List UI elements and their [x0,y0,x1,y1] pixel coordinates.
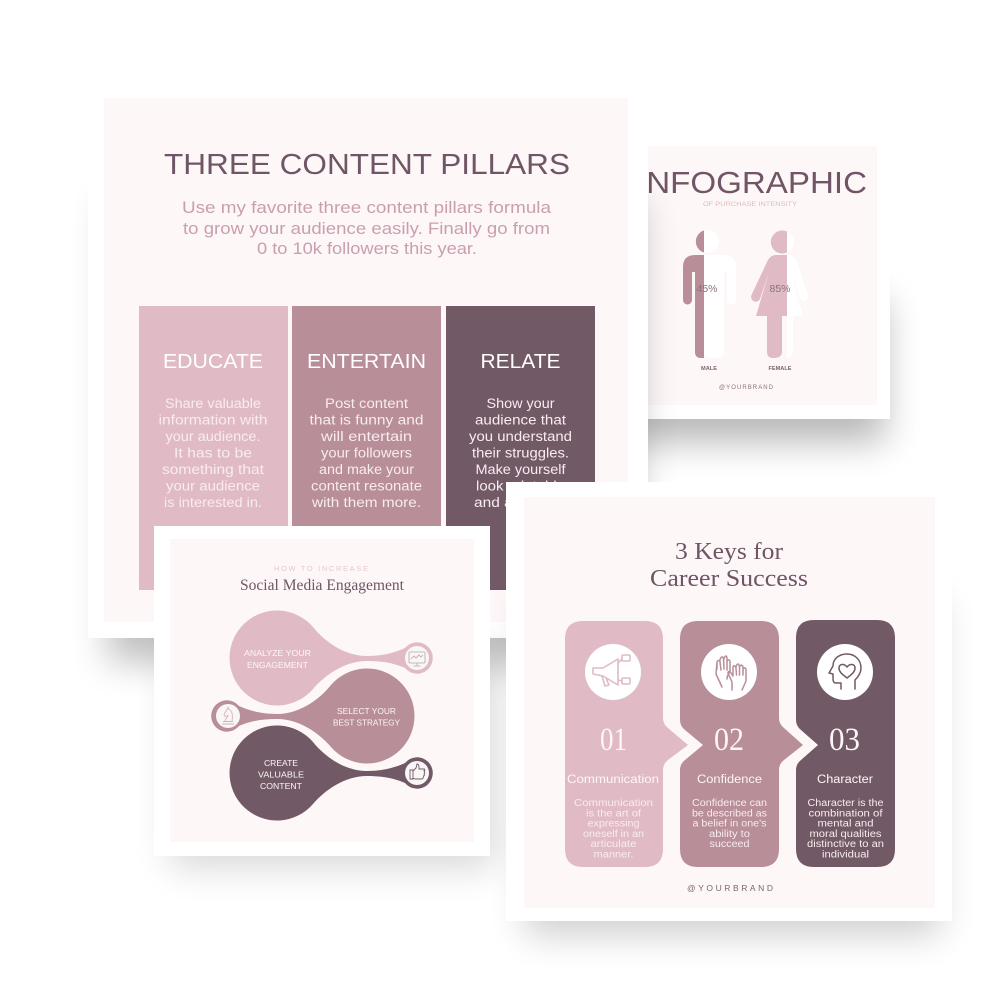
intro text [182,199,552,258]
key card: character: mental and [818,819,874,830]
pillar column: relate: Show your [486,396,555,411]
key card: communication [565,621,688,867]
brand handle: @YOURBRAND [719,385,774,391]
panel: career success card [506,482,952,935]
pillar column: relate: audience that [475,412,566,428]
pillar column: educate: something that [162,462,264,477]
panel: infographic purchase intensity card [600,132,890,442]
key card: character: 03 [829,722,860,758]
female percentage: 85% [770,284,791,295]
pillar column: relate: look relatable [476,478,565,494]
blob: create valuable content: VALUABLE [258,770,304,780]
blob: create valuable content: CONTENT [260,781,302,791]
key card: character [796,620,895,867]
blob: analyze your engagement: ANALYZE YOUR [244,648,311,658]
key card: character: distinctive to an [807,839,884,850]
key card: character: moral qualities [810,829,882,840]
icon: male figure 45% [683,230,736,358]
heading: three content pillars: THREE CONTENT PILLARS [164,149,570,181]
heading: 3 keys for career success: Career Success [650,565,808,592]
heading: social media engagement: Social Media Engagement [240,577,405,594]
icon: monitor [409,652,425,666]
icon: head with heart [829,654,861,689]
key card: character: combination of [808,808,883,819]
key card: communication: oneself in an [583,829,644,840]
pillar column: entertain: will entertain [320,429,412,444]
pillar column: entertain: with them more. [311,495,421,510]
pillar column: educate [139,306,288,590]
icon: female figure 85% [751,231,808,358]
blob: analyze your engagement: ENGAGEMENT [247,660,308,670]
pillar column: entertain: your followers [321,446,412,460]
female label: FEMALE [768,366,792,372]
blob: create valuable content: CREATE [264,758,298,768]
intro text: Use my favorite three content pillars formula [182,199,552,217]
eyebrow: how to increase: HOW TO INCREASE [274,564,368,573]
blob: create valuable content [230,726,433,820]
key card: confidence: a belief in one's [692,819,766,830]
male percentage: 45% [696,284,718,295]
blob: select your best strategy [211,669,414,764]
pillar column: educate: It has to be [174,446,252,460]
key card: communication: is the art of [586,808,641,819]
key card: communication: manner. [594,850,634,860]
icon: thumbs up [410,764,425,779]
icon: megaphone [593,655,630,686]
blob: analyze your engagement [230,610,433,706]
key card: confidence: Confidence [697,774,762,786]
icon: raised hands [716,656,746,690]
heading: 3 keys for career success [650,538,808,592]
pillar column: educate: your audience [166,478,260,494]
panel: social media engagement card [154,526,495,868]
icon: chess knight [222,708,234,724]
pillar column: educate: is interested in. [164,495,262,510]
key card: character: Character is the [808,798,884,809]
key card: confidence: succeed [710,839,750,850]
key card: confidence: Confidence can [692,798,767,809]
key card: confidence: ability to [709,829,750,840]
key card: communication: 01 [600,722,627,758]
pillar column: relate: and authentic [474,495,567,510]
pillar column: entertain: ENTERTAIN [307,351,426,373]
key card: confidence: 02 [714,722,744,758]
pillar column: relate: you understand [469,429,572,444]
pillar column: relate: their struggles. [472,446,569,460]
pillar column: educate: information with [158,412,268,428]
blob: select your best strategy: BEST STRATEGY [333,718,400,728]
pillar column: relate [446,306,595,590]
key card: communication: Communication [574,798,653,809]
panel: three content pillars card [88,82,648,662]
key card: character: Character [817,774,873,786]
pillar column: educate: Share valuable [165,396,261,411]
pillar column: relate: RELATE [480,351,560,373]
heading: 3 keys for career success: 3 Keys for [675,538,783,565]
pillar column: educate: your audience. [166,429,260,444]
pillar column: entertain [292,306,441,590]
male label: MALE [701,366,718,372]
heading: infographic: INFOGRAPHIC [637,165,867,200]
key card: communication: articulate [590,839,637,850]
key card: communication: expressing [588,819,640,830]
key card: character: individual [822,850,869,860]
blob: select your best strategy: SELECT YOUR [337,706,396,716]
intro text: to grow your audience easily. Finally go from [183,220,550,238]
pillar column: relate: Make yourself [476,462,566,477]
pillar column: entertain: and make your [319,462,415,477]
key card: communication: Communication [567,774,659,786]
pillar column: entertain: that is funny and [310,412,424,428]
subheading: of purchase intensity: OF PURCHASE INTENSITY [703,202,797,208]
pillar column: educate: EDUCATE [163,351,263,373]
intro text: 0 to 10k followers this year. [257,240,477,258]
key card: confidence [680,621,803,867]
brand handle: @YOURBRAND [687,883,773,893]
pillar column: entertain: content resonate [311,478,422,494]
pillar column: entertain: Post content [325,396,408,411]
key card: confidence: be described as [692,808,767,819]
